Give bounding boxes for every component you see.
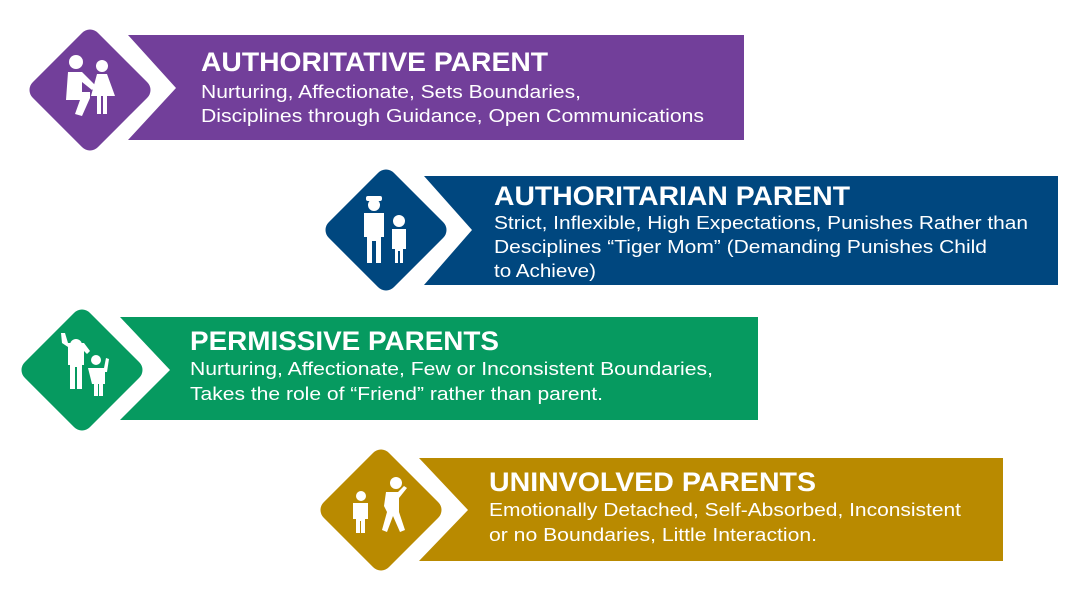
- title: PERMISSIVE PARENTS: [190, 326, 499, 356]
- row: permissive parents: [17, 305, 758, 435]
- banner bar: [120, 317, 758, 420]
- icon: parent kneeling with child: [66, 55, 115, 116]
- description: Nurturing, Affectionate, Few or Inconsistent Boundaries,: [190, 359, 713, 379]
- icon: parent and child cheering: [61, 333, 109, 396]
- title: UNINVOLVED PARENTS: [489, 467, 816, 497]
- diamond icon badge: [25, 25, 155, 155]
- diamond icon badge: [321, 165, 451, 295]
- description: Nurturing, Affectionate, Sets Boundaries,: [201, 82, 581, 102]
- title: AUTHORITARIAN PARENT: [494, 181, 851, 211]
- row: permissive parents: Takes the role of “Friend” rather than parent.: [190, 384, 603, 404]
- row: uninvolved parents: or no Boundaries, Little Interaction.: [489, 525, 817, 545]
- banner bar: [424, 176, 1058, 285]
- title: AUTHORITATIVE PARENT: [201, 47, 549, 77]
- row: authoritative parent: [25, 25, 744, 155]
- diamond icon badge: [17, 305, 147, 435]
- row: authoritarian parent: Desciplines “Tiger Mom” (Demanding Punishes Child: [494, 237, 987, 257]
- banner bar: [419, 458, 1003, 561]
- row: authoritarian parent: to Achieve): [494, 261, 596, 281]
- description: Emotionally Detached, Self-Absorbed, Inconsistent: [489, 500, 961, 520]
- description: Strict, Inflexible, High Expectations, Punishes Rather than: [494, 213, 1028, 233]
- row: authoritative parent: Disciplines through Guidance, Open Communications: [201, 106, 704, 126]
- banner bar: [128, 35, 744, 140]
- row: authoritarian parent: [321, 165, 1058, 295]
- icon: child and distracted parent: [353, 477, 407, 533]
- icon: strict parent and child: [364, 196, 406, 263]
- row: uninvolved parents: [316, 445, 1003, 575]
- diamond icon badge: [316, 445, 446, 575]
